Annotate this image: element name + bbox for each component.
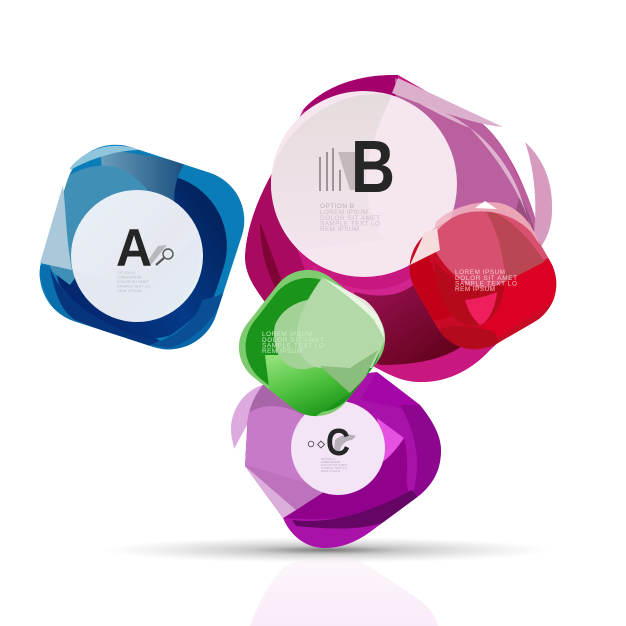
panel: red glossy shape xyxy=(410,201,556,350)
icon: magnifier xyxy=(156,249,173,265)
text block A: DOLOR SIT AMET xyxy=(117,279,150,284)
text block B: DOLOR SIT AMET xyxy=(320,215,380,222)
dark inner ring xyxy=(56,178,227,338)
text block B: SAMPLE TEXT LO xyxy=(320,220,380,228)
text block red: DOLOR SIT AMET xyxy=(455,275,517,282)
translucent left fin xyxy=(40,185,72,270)
letter B xyxy=(338,125,395,208)
text block B: REM IPSUM xyxy=(320,226,359,233)
text block A: LOREM IPSUM xyxy=(117,274,141,280)
text block A: SAMPLE TEXT LO xyxy=(117,284,150,288)
icon: circle and diamond xyxy=(308,441,324,448)
text block A: OPTION A xyxy=(117,270,135,275)
maroon body xyxy=(354,285,461,365)
text block red: SAMPLE TEXT LO xyxy=(455,280,517,288)
upper right mauve body xyxy=(395,78,535,230)
text block green: LOREM IPSUM xyxy=(262,331,312,338)
panel B: magenta shape xyxy=(240,70,560,390)
text block green: REM IPSUM xyxy=(262,348,302,355)
left dark band xyxy=(245,177,305,302)
letter C: C xyxy=(326,422,350,464)
letter B: B xyxy=(351,125,395,208)
light circle A xyxy=(71,190,203,322)
text block green xyxy=(262,331,324,355)
panel: green glossy shape xyxy=(238,270,386,416)
text block C: LOREM IPSUM xyxy=(321,460,341,464)
pink band under circle xyxy=(313,266,413,296)
text block C: DOLOR SIT AMET xyxy=(321,463,347,467)
text block C xyxy=(321,457,348,473)
panel C: purple shape xyxy=(231,372,441,548)
text block B: LOREM IPSUM xyxy=(320,209,368,216)
text block B: OPTION B xyxy=(320,203,354,210)
text block C: REM IPSUM xyxy=(321,469,341,473)
text block A xyxy=(117,270,150,293)
text block C: OPTION C xyxy=(321,457,335,461)
infographic canvas xyxy=(40,75,556,626)
light circle B xyxy=(271,91,457,277)
red shape top highlight xyxy=(432,202,540,245)
text block A: REM IPSUM xyxy=(117,288,141,293)
text block green: SAMPLE TEXT LO xyxy=(262,342,324,350)
pale right section xyxy=(297,278,385,368)
letter A: A xyxy=(116,219,152,278)
ground shadow xyxy=(102,537,552,563)
text block B xyxy=(320,203,380,233)
inner dark green xyxy=(246,278,380,412)
light circle C xyxy=(291,401,385,495)
floor reflection xyxy=(250,557,438,626)
text block red: LOREM IPSUM xyxy=(455,269,505,276)
translucent fin xyxy=(231,385,263,449)
translucent right fin xyxy=(525,142,552,248)
icon: bars xyxy=(320,148,340,191)
green shape highlight xyxy=(322,277,384,338)
text block red xyxy=(455,269,517,293)
translucent top fin xyxy=(392,78,503,127)
text block green: DOLOR SIT AMET xyxy=(262,337,324,344)
text block C: SAMPLE TEXT LO xyxy=(321,466,348,470)
bright lower zone xyxy=(265,355,352,420)
panel A: blue shape xyxy=(40,144,244,350)
text block red: REM IPSUM xyxy=(455,286,495,293)
pale blob xyxy=(274,300,316,370)
